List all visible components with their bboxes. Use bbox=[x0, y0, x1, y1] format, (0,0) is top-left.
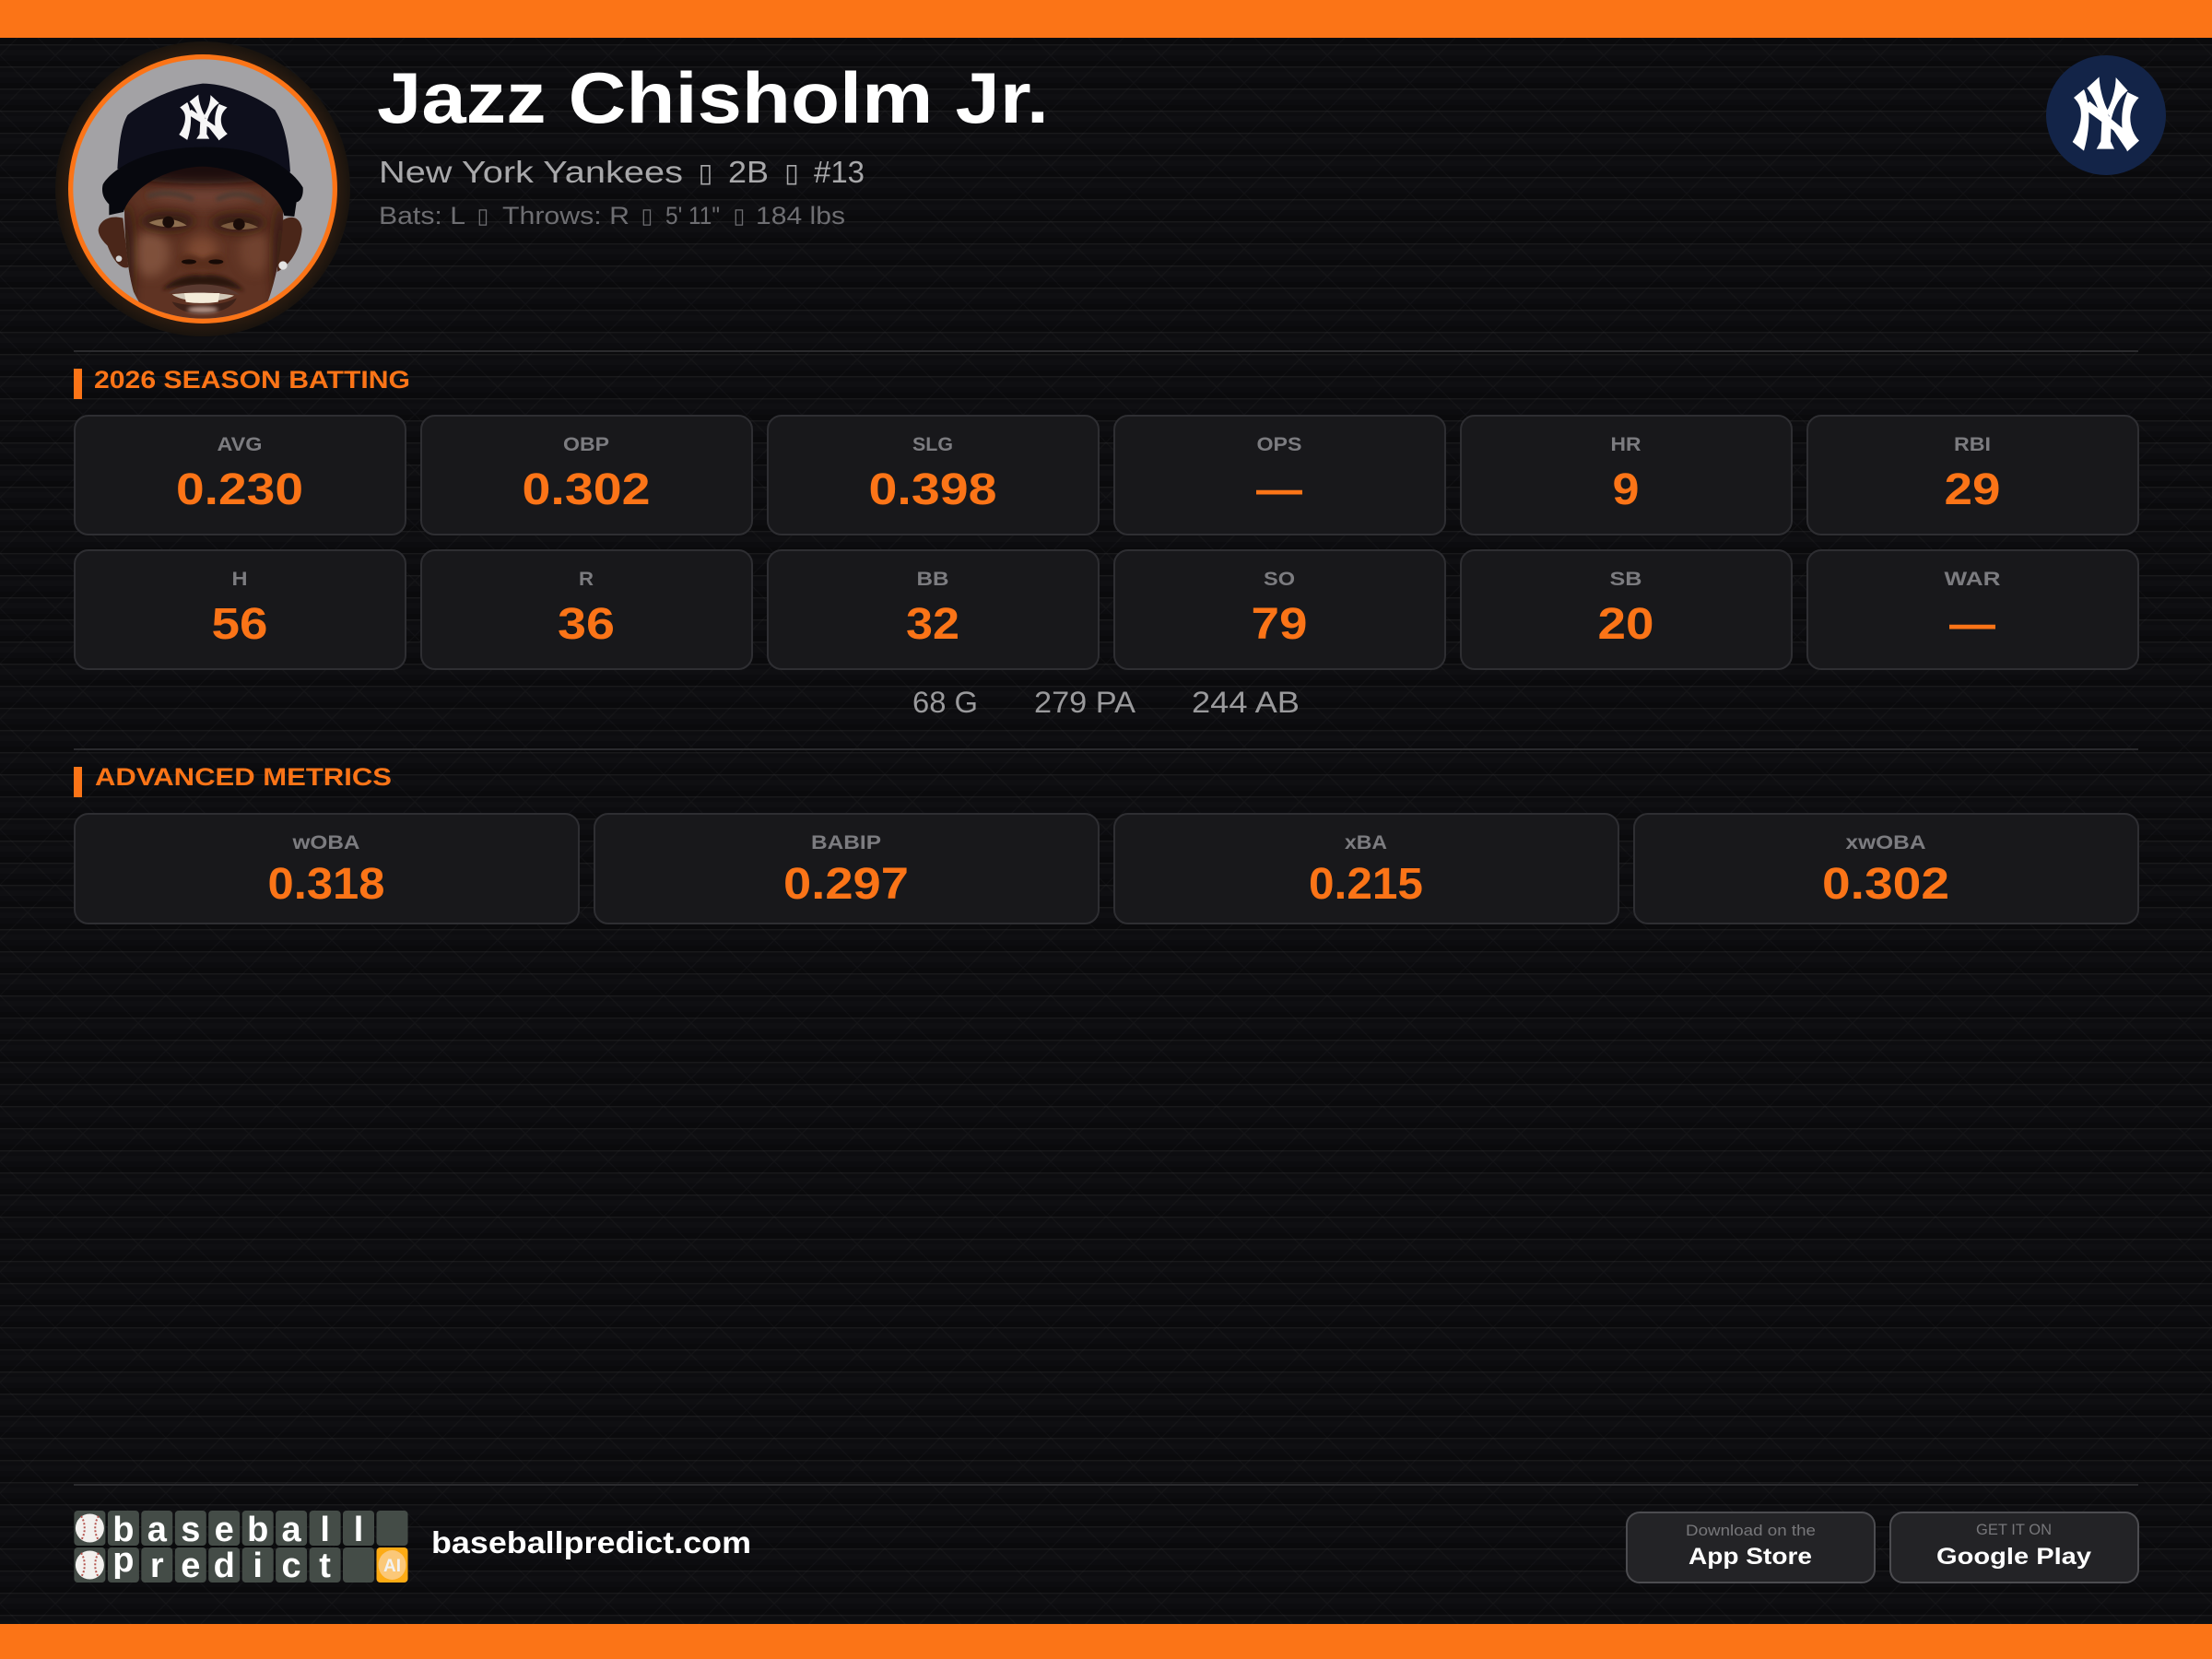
player team, position and number line bbox=[379, 155, 865, 189]
stat card: R bbox=[421, 550, 752, 669]
stat card: xwOBA bbox=[1634, 814, 2138, 924]
stat card: xBA: 0.215 bbox=[1309, 860, 1423, 909]
icon: AI badge bbox=[378, 1550, 406, 1580]
stat card: wOBA: 0.318 bbox=[267, 860, 385, 909]
stat card: SLG: SLG bbox=[912, 434, 953, 455]
stat card: OBP: 0.302 bbox=[522, 465, 651, 514]
stat card: HR: 9 bbox=[1613, 465, 1639, 514]
brand logo: baseball predict tiles: a bbox=[147, 1511, 168, 1549]
stat card: AVG: 0.230 bbox=[176, 465, 303, 514]
player physical details line: ▯ bbox=[734, 204, 745, 228]
website url: baseballpredict.com bbox=[431, 1525, 751, 1559]
bottom accent bar bbox=[0, 1624, 2212, 1659]
stat card: HR bbox=[1461, 416, 1792, 535]
brand logo: baseball predict tiles: c bbox=[282, 1547, 301, 1585]
brand logo: baseball predict tiles bbox=[74, 1511, 408, 1585]
button: Google Play: Google Play bbox=[1936, 1544, 2091, 1570]
stat card: RBI: 29 bbox=[1945, 465, 2000, 514]
stat card: xwOBA: xwOBA bbox=[1845, 832, 1926, 853]
stat card: HR: HR bbox=[1611, 434, 1641, 455]
brand logo: baseball predict tiles: b bbox=[112, 1511, 135, 1549]
stat card: BABIP bbox=[594, 814, 1099, 924]
team logo: Yankees bbox=[2046, 55, 2166, 175]
stat card: H: 56 bbox=[212, 600, 267, 649]
player team, position and number line: New York Yankees bbox=[379, 155, 683, 189]
stat card: OPS: — bbox=[1256, 465, 1302, 514]
player name title: Jazz Chisholm Jr. bbox=[377, 57, 1049, 138]
games and plate appearance summary bbox=[912, 686, 1300, 719]
icon: AI badge: AI bbox=[383, 1557, 401, 1576]
button: Google Play: GET IT ON bbox=[1976, 1521, 2052, 1538]
player physical details line: ▯ bbox=[641, 204, 653, 228]
panel: batting stats grid bbox=[75, 416, 2138, 669]
stat card: WAR: WAR bbox=[1945, 569, 2000, 590]
stat card: SO: SO bbox=[1264, 569, 1295, 590]
stat card: OBP bbox=[421, 416, 752, 535]
stat card: xwOBA: 0.302 bbox=[1822, 860, 1949, 909]
brand logo: baseball predict tiles: e bbox=[215, 1511, 234, 1549]
brand logo: baseball predict tiles: r bbox=[150, 1547, 164, 1585]
stat card: RBI bbox=[1807, 416, 2138, 535]
panel: advanced metrics grid bbox=[75, 814, 2138, 924]
stat card: SLG: 0.398 bbox=[868, 465, 997, 514]
player physical details line: ▯ bbox=[477, 204, 488, 228]
games and plate appearance summary: 279 PA bbox=[1034, 686, 1136, 719]
player physical details line: Throws: R bbox=[502, 202, 629, 229]
stat card: BB bbox=[768, 550, 1099, 669]
player physical details line bbox=[379, 202, 845, 229]
brand logo: baseball predict tiles: d bbox=[214, 1547, 235, 1585]
brand logo: baseball predict tiles: s bbox=[181, 1511, 200, 1549]
icon: baseball bbox=[76, 1513, 104, 1543]
stat card: SLG bbox=[768, 416, 1099, 535]
games and plate appearance summary: 244 AB bbox=[1192, 686, 1300, 719]
player headshot bbox=[55, 41, 350, 336]
icon: baseball bbox=[76, 1550, 104, 1580]
button: Google Play bbox=[1890, 1512, 2138, 1583]
stat card: OPS bbox=[1114, 416, 1445, 535]
stat card: AVG: AVG bbox=[218, 434, 262, 455]
brand logo: baseball predict tiles: b bbox=[247, 1511, 268, 1549]
stat card: RBI: RBI bbox=[1954, 434, 1991, 455]
stat card: WAR: — bbox=[1949, 600, 1995, 649]
stat card: SB: SB bbox=[1609, 569, 1642, 590]
stat card: BB: BB bbox=[916, 569, 949, 590]
stat card: wOBA: wOBA bbox=[291, 832, 359, 853]
stat card: BABIP: 0.297 bbox=[783, 860, 909, 909]
games and plate appearance summary: 68 G bbox=[912, 686, 978, 719]
button: App Store: Download on the bbox=[1686, 1522, 1816, 1539]
section heading: advanced metrics bbox=[74, 763, 392, 797]
stat card: SO: 79 bbox=[1252, 600, 1307, 649]
stat card: H: H bbox=[232, 569, 247, 590]
player physical details line: 184 lbs bbox=[756, 202, 845, 229]
stat card: OPS: OPS bbox=[1257, 434, 1301, 455]
player physical details line: 5' 11" bbox=[665, 202, 720, 229]
stat card: OBP: OBP bbox=[563, 434, 609, 455]
player team, position and number line: #13 bbox=[814, 155, 865, 189]
stat card: H bbox=[75, 550, 406, 669]
section heading: 2026 season batting: 2026 SEASON BATTING bbox=[94, 366, 410, 394]
player team, position and number line: ▯ bbox=[699, 159, 712, 187]
stat card: SB bbox=[1461, 550, 1792, 669]
brand logo: baseball predict tiles: t bbox=[319, 1547, 331, 1585]
stat card: R: R bbox=[579, 569, 594, 590]
brand logo: baseball predict tiles: i bbox=[253, 1547, 263, 1585]
player physical details line: Bats: L bbox=[379, 202, 465, 229]
brand logo: baseball predict tiles: l bbox=[320, 1511, 330, 1549]
section heading: advanced metrics: ADVANCED METRICS bbox=[95, 763, 392, 791]
icon: cap NY logo bbox=[179, 95, 228, 140]
stat card: SO bbox=[1114, 550, 1445, 669]
stat card: xBA: xBA bbox=[1345, 832, 1387, 853]
stat card: R: 36 bbox=[558, 600, 615, 649]
top accent bar bbox=[0, 0, 2212, 38]
player team, position and number line: 2B bbox=[728, 155, 769, 189]
stat card: xBA bbox=[1114, 814, 1618, 924]
stat card: BABIP: BABIP bbox=[811, 832, 881, 853]
button: App Store bbox=[1627, 1512, 1875, 1583]
player team, position and number line: ▯ bbox=[784, 159, 799, 187]
stat card: BB: 32 bbox=[906, 600, 959, 649]
button: App Store: App Store bbox=[1688, 1544, 1812, 1570]
brand logo: baseball predict tiles: a bbox=[282, 1511, 302, 1549]
stat card: SB: 20 bbox=[1598, 600, 1653, 649]
stat card: wOBA bbox=[75, 814, 579, 924]
stat card: WAR bbox=[1807, 550, 2138, 669]
brand logo: baseball predict tiles: l bbox=[354, 1511, 363, 1549]
stat card: AVG bbox=[75, 416, 406, 535]
brand logo: baseball predict tiles: p bbox=[112, 1541, 135, 1580]
brand logo: baseball predict tiles: e bbox=[181, 1547, 200, 1585]
